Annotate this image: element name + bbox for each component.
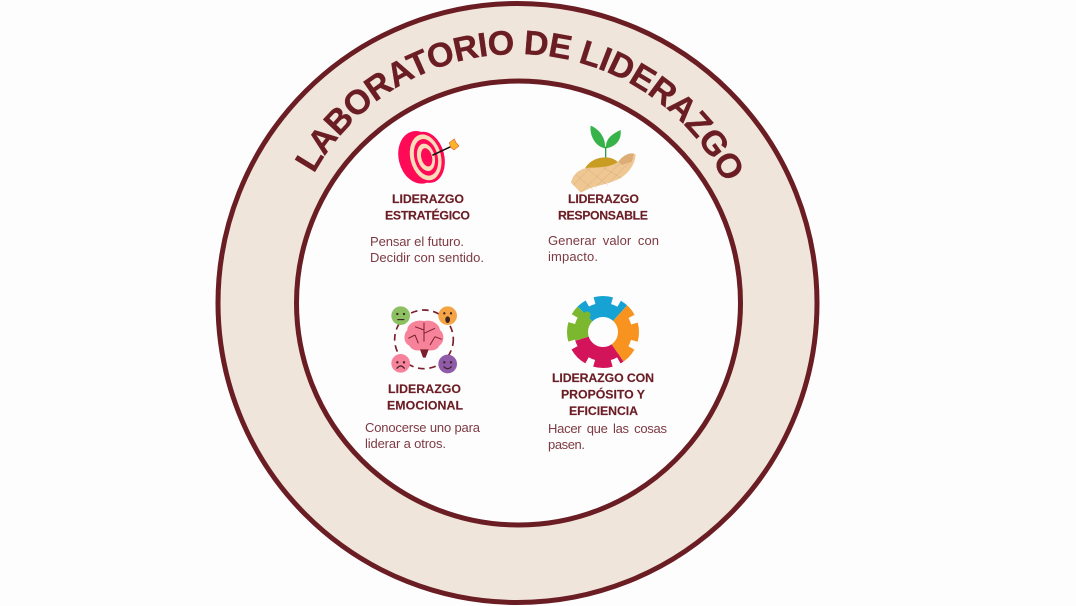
heading: LIDERAZGO	[568, 192, 639, 206]
panel: liderazgo con propósito y eficiencia: PROPÓSITO Y	[561, 386, 645, 402]
panel: liderazgo responsable: impacto.	[548, 249, 598, 264]
body text: Conocerse uno para	[365, 420, 481, 435]
panel: liderazgo emocional: EMOCIONAL	[387, 398, 463, 412]
panel: liderazgo con propósito y eficiencia	[548, 301, 668, 452]
icon: brain with emotion faces	[391, 306, 457, 373]
panel: liderazgo estratégico: ESTRATÉGICO	[385, 208, 470, 222]
panel: liderazgo estratégico	[370, 127, 484, 265]
heading: LIDERAZGO CON	[552, 371, 654, 385]
panel: liderazgo con propósito y eficiencia: pasen.	[548, 437, 585, 452]
outer ring	[218, 4, 817, 602]
panel: liderazgo responsable	[548, 126, 659, 264]
body text: Generar valor con	[548, 233, 659, 248]
heading: LIDERAZGO	[388, 382, 461, 396]
title: LABORATORIO DE LIDERAZGO	[294, 30, 742, 178]
panel: liderazgo con propósito y eficiencia: EFICIENCIA	[569, 404, 638, 418]
panel: liderazgo emocional: liderar a otros.	[365, 436, 446, 451]
panel: liderazgo emocional	[365, 306, 481, 451]
icon: puzzle gear	[572, 301, 634, 363]
icon: target with arrow	[393, 127, 459, 188]
panel: liderazgo estratégico: Decidir con sentido.	[370, 250, 484, 265]
heading: LIDERAZGO	[392, 192, 464, 206]
inner circle	[296, 81, 740, 525]
body text: Hacer que las cosas	[548, 421, 668, 436]
panel: liderazgo responsable: RESPONSABLE	[558, 208, 648, 222]
body text: Pensar el futuro.	[370, 234, 464, 249]
icon: hand with sprout	[571, 126, 636, 193]
